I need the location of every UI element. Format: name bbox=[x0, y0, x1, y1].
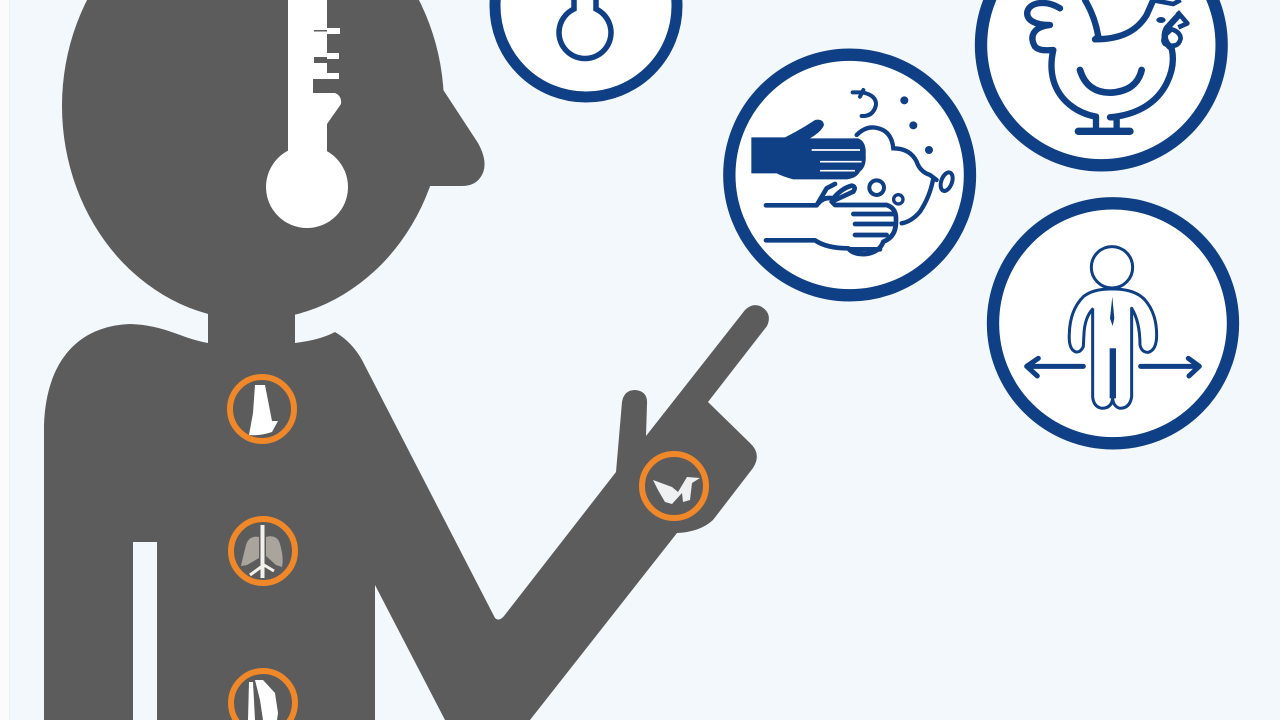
icon: thermometer circle bbox=[495, 0, 677, 97]
icon: thermometer on head bbox=[266, 0, 348, 228]
icon: social distancing circle bbox=[993, 203, 1233, 443]
icon: stomach ring bbox=[231, 671, 295, 720]
dark hand bbox=[751, 120, 866, 179]
icon: chicken circle bbox=[981, 0, 1222, 165]
washing hand bbox=[766, 184, 896, 254]
icon: hand ring bbox=[642, 454, 706, 518]
icon: lungs ring bbox=[231, 519, 295, 583]
icon: handwashing circle bbox=[729, 55, 970, 295]
soap foam bbox=[857, 127, 937, 223]
bubbles bbox=[853, 90, 955, 204]
icon: throat ring bbox=[230, 377, 294, 441]
person silhouette bbox=[44, 0, 769, 720]
